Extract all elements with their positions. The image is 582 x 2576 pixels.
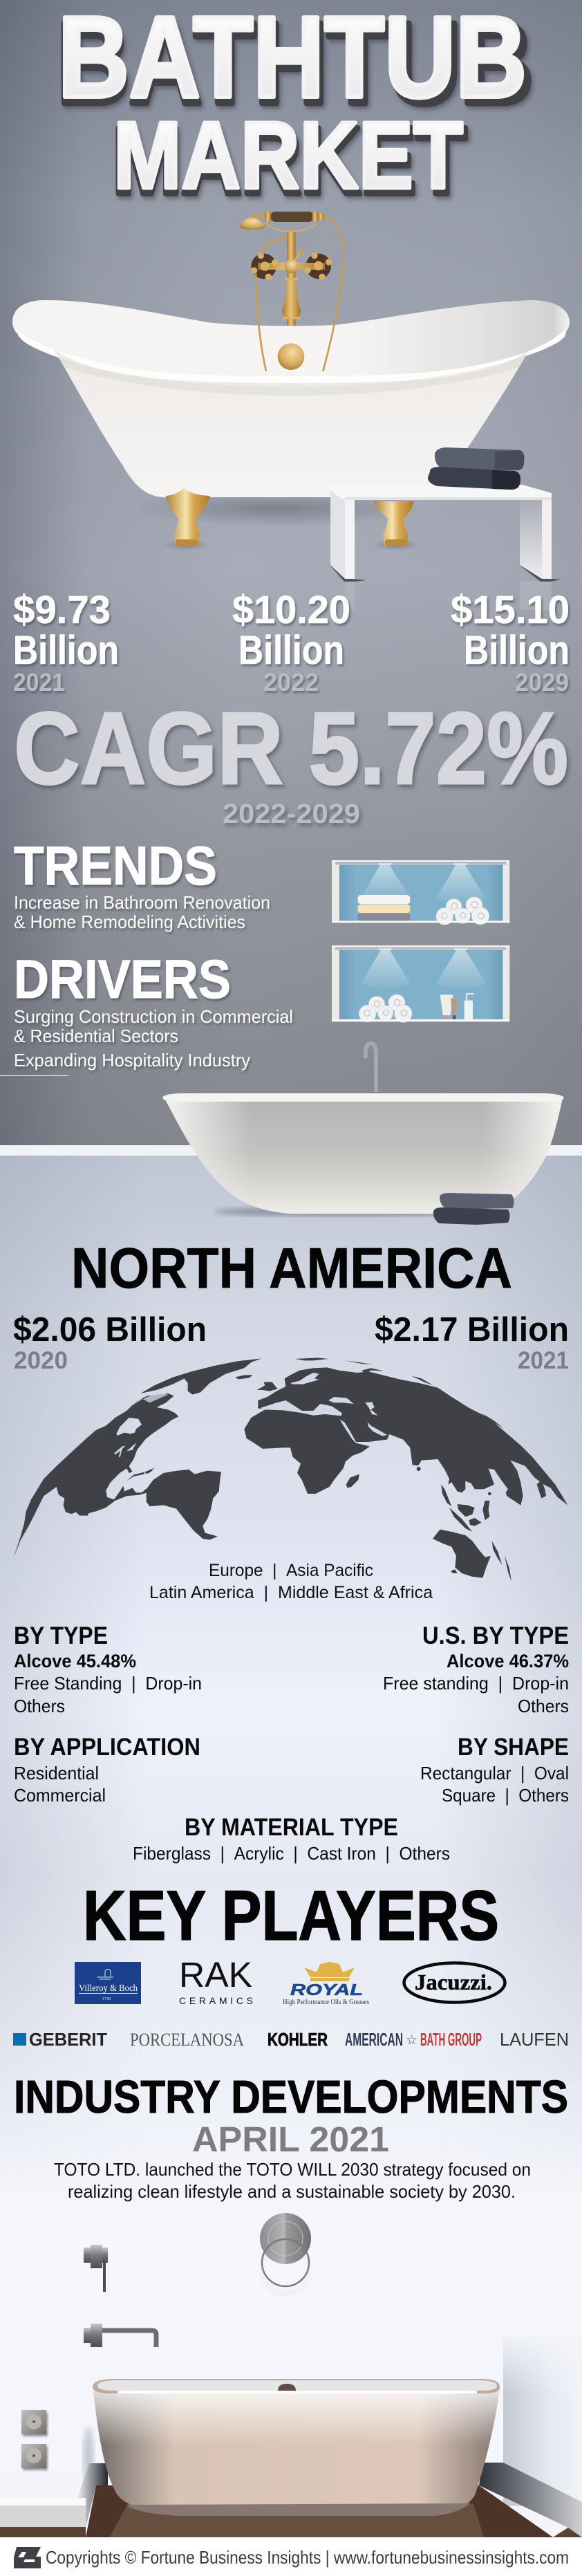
logo: American Bath Group: ☆ [406, 2033, 417, 2048]
2022 value: Billion [238, 628, 344, 673]
shelf niche: towels [332, 860, 509, 925]
trends [14, 835, 270, 932]
tub front lip [17, 329, 566, 387]
tub interior [12, 300, 570, 386]
drivers: Surging Construction in Commercial [14, 1006, 293, 1027]
bench right leg [520, 500, 542, 579]
segment: by application: BY APPLICATION [14, 1734, 200, 1761]
gold foot left [166, 488, 210, 546]
other regions: Europe | Asia Pacific [209, 1561, 373, 1580]
2029 value: 2029 [515, 668, 569, 696]
illustration: bathroom wall [0, 2213, 582, 2537]
title: Bathtub Market: MARKET [113, 108, 467, 214]
stat: 2021 [375, 1311, 569, 1374]
2022 value: 2022 [263, 668, 319, 696]
illustration: bench with towels [329, 447, 561, 610]
tub body [54, 349, 529, 497]
2021 value: Billion [13, 628, 119, 673]
world map [13, 1358, 568, 1582]
stat: 2021: 2021 [518, 1347, 569, 1374]
logo: American Bath Group: AMERICAN [345, 2029, 403, 2050]
segment: by type: Others [14, 1696, 65, 1716]
segment: by shape [420, 1734, 569, 1806]
faucet [366, 1044, 376, 1092]
pink tub body [93, 2387, 500, 2516]
towels [428, 447, 524, 490]
stat: 2020 [13, 1311, 207, 1374]
logo: Royal: High Performance Oils & Greases [283, 1999, 369, 2006]
footer [0, 2537, 582, 2576]
CAGR heading: 2022-2029 [223, 799, 360, 829]
faucet column [239, 212, 332, 326]
wall spout [84, 2324, 156, 2347]
overflow drain [278, 2384, 296, 2391]
2021 value: $9.73 [13, 588, 111, 632]
segment: U.S. by type: Free standing | Drop-in [383, 1673, 569, 1694]
heading: North America: NORTH AMERICA [71, 1236, 512, 1300]
segment: by type: Alcove 45.48% [14, 1651, 136, 1671]
2029 value: $15.10 [451, 588, 570, 632]
logo: Villeroy & Boch: 1748 [102, 1997, 111, 2001]
logo: American Bath Group: BATH GROUP [420, 2029, 482, 2050]
logo: Royal [283, 1962, 369, 2006]
stats: market size [13, 588, 570, 696]
title: Bathtub Market [57, 0, 533, 214]
segment: U.S. by type: Alcove 46.37% [447, 1651, 569, 1671]
logo: Jacuzzi: Jacuzzi. [415, 1970, 492, 1994]
stat: 2020: 2020 [14, 1347, 68, 1374]
logo: RAK Ceramics: RAK [179, 1955, 252, 1994]
logo: Jacuzzi [404, 1963, 505, 2003]
title: Bathtub Market: MARKET [113, 102, 463, 209]
other regions [149, 1561, 433, 1602]
segment: by application: Commercial [14, 1785, 106, 1806]
segment: by type: BY TYPE [14, 1622, 108, 1649]
2021 value [13, 588, 119, 696]
segment: by shape: Rectangular | Oval [420, 1763, 569, 1783]
segment: by shape: Square | Others [442, 1785, 569, 1806]
skirting right [479, 2463, 582, 2537]
segment: by material type: Fiberglass | Acrylic | Cast Iron | Others [133, 1843, 450, 1864]
development description: TOTO LTD. launched the TOTO WILL 2030 strategy focused on [54, 2159, 531, 2180]
segment: by type: Free Standing | Drop-in [14, 1673, 202, 1694]
logo: Royal: ROYAL [290, 1981, 363, 1999]
segment: by shape: BY SHAPE [458, 1734, 569, 1761]
trends: & Home Remodeling Activities [14, 911, 245, 932]
drivers: DRIVERS [14, 948, 231, 1010]
logo: Kohler: KOHLER [267, 2029, 328, 2050]
segment: by application [14, 1734, 200, 1806]
2022 value [232, 588, 350, 696]
socket 2 [21, 2444, 46, 2468]
logo: Villeroy & Boch [75, 1962, 141, 2004]
2021 value: 2021 [13, 668, 65, 696]
floor [86, 2485, 553, 2537]
logo: Porcelanosa: PORCELANOSA [130, 2030, 244, 2050]
segment: by material type [133, 1814, 450, 1864]
logo: RAK Ceramics: CERAMICS [179, 1995, 253, 2006]
2029 value [451, 588, 570, 696]
tub body [165, 1098, 563, 1214]
illustration: modern bathtub [162, 1044, 564, 1225]
logo: Laufen: LAUFEN [500, 2029, 569, 2050]
wall handle [84, 2245, 108, 2292]
bench shadows [329, 564, 561, 582]
trends: Increase in Bathroom Renovation [14, 892, 270, 913]
logo: Geberit: GEBERIT [29, 2029, 107, 2050]
segment: U.S. by type: Others [518, 1696, 569, 1716]
segment: by material type: BY MATERIAL TYPE [185, 1814, 398, 1841]
bench top [330, 485, 552, 500]
gold foot right [374, 501, 414, 546]
background: upper wall [0, 0, 582, 1145]
date: April 2021: APRIL 2021 [192, 2120, 389, 2159]
background: lower section [0, 1145, 582, 2537]
tub rim [93, 2379, 500, 2393]
drivers: & Residential Sectors [14, 1026, 178, 1046]
socket 1 [21, 2410, 46, 2434]
heading: key players: KEY PLAYERS [83, 1876, 499, 1955]
segment: U.S. by type: U.S. BY TYPE [422, 1622, 569, 1649]
segment: by type [14, 1622, 202, 1716]
footer logo [14, 2547, 41, 2568]
logo: Villeroy & Boch: Villeroy & Boch [79, 1983, 138, 1994]
other regions: Latin America | Middle East & Africa [149, 1583, 433, 1602]
stat: 2021: $2.17 Billion [375, 1311, 569, 1349]
2022 value: $10.20 [232, 588, 350, 632]
floor shadow [214, 1207, 477, 1216]
segment: by application: Residential [14, 1763, 99, 1783]
towel ring [260, 2213, 311, 2293]
development description: realizing clean lifestyle and a sustainable society by 2030. [68, 2181, 516, 2202]
drivers [14, 948, 293, 1071]
development description [54, 2159, 531, 2202]
illustration: clawfoot bathtub [12, 212, 570, 550]
tub reflection [109, 2504, 484, 2537]
shelf niche: towels and bottles [332, 945, 509, 1022]
drivers: Expanding Hospitality Industry [14, 1050, 250, 1071]
skirting left [77, 2463, 108, 2527]
segment: U.S. by type [383, 1622, 569, 1716]
bench reflection [345, 581, 552, 610]
towels [440, 1193, 514, 1210]
tub rim [162, 1093, 564, 1102]
corner wall shading [503, 2337, 582, 2506]
stat: 2020: $2.06 Billion [13, 1311, 207, 1349]
trends: TRENDS [14, 835, 217, 896]
hose and plug [256, 216, 344, 371]
bench left leg [330, 490, 345, 579]
